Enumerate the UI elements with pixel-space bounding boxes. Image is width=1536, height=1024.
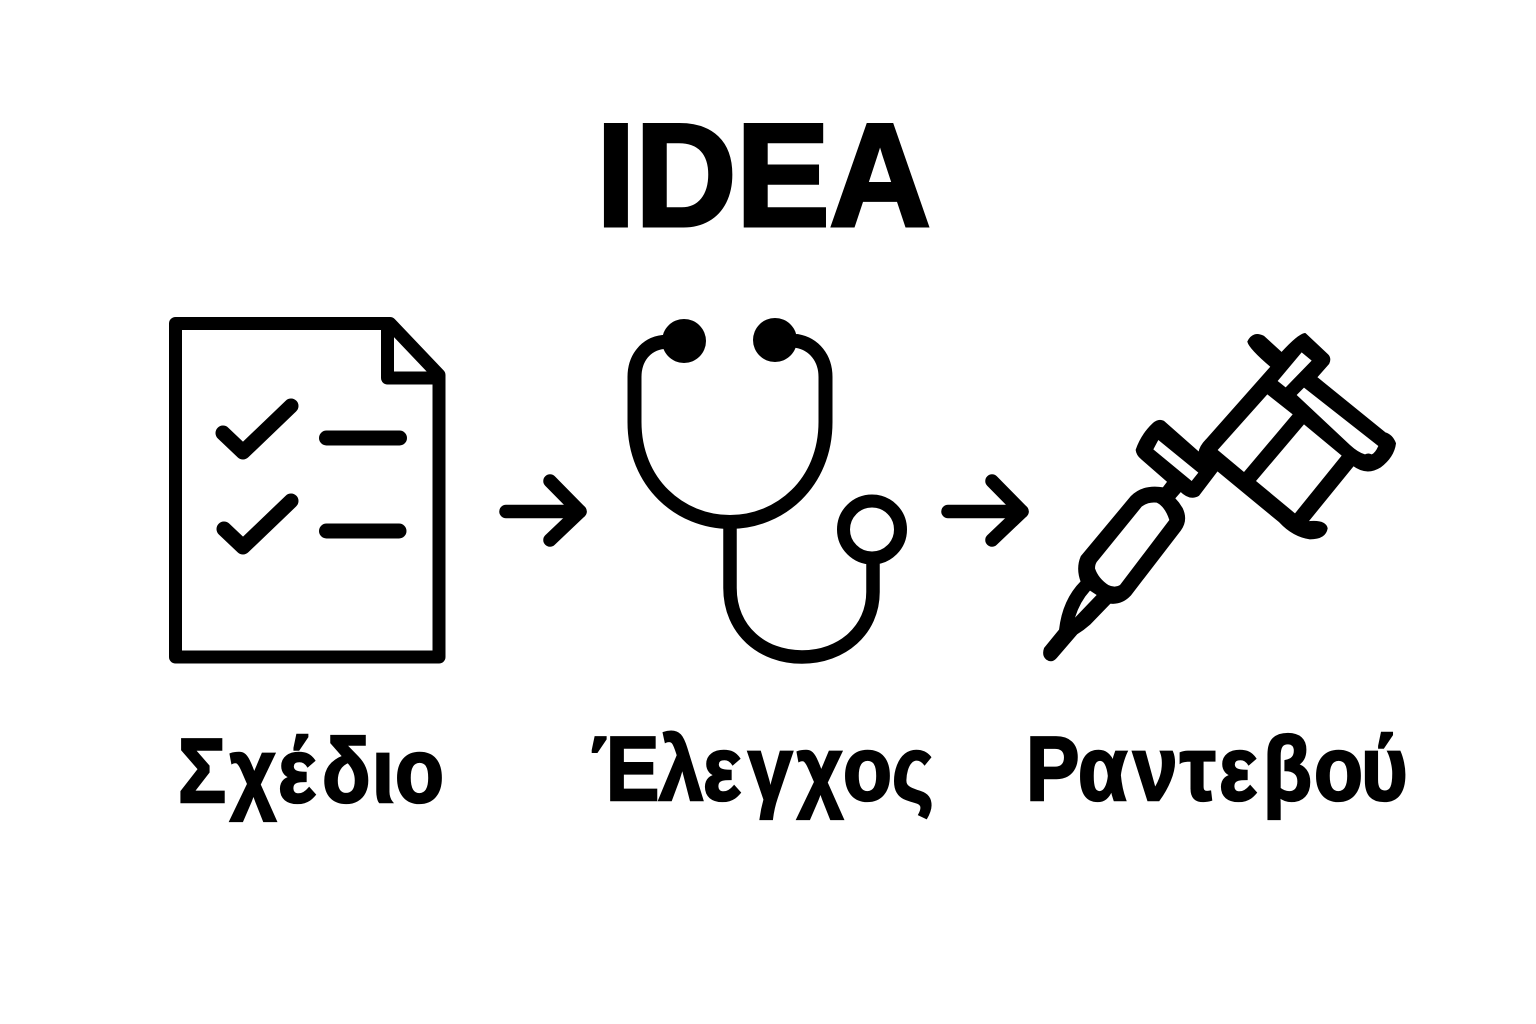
label: appointment: Ραντεβού	[1026, 719, 1408, 820]
title: IDEA	[596, 94, 930, 256]
icon: stethoscope	[634, 318, 900, 657]
label: check: Έλεγχος	[591, 719, 934, 820]
label: plan: Σχέδιο	[178, 721, 444, 822]
arrow: check to appointment	[948, 481, 1022, 540]
arrow: plan to check	[506, 481, 580, 540]
icon: checklist document	[176, 324, 439, 657]
icon: tattoo machine	[1044, 334, 1395, 660]
